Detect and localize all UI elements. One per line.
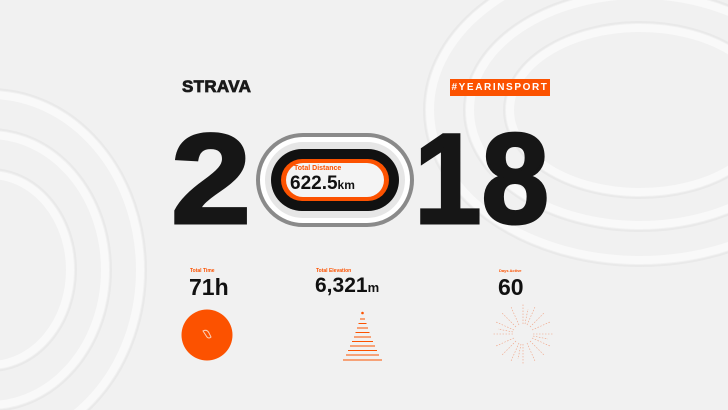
stat: total time: Total Time [190, 268, 215, 274]
logo: STRAVA: STRAVA [182, 77, 251, 96]
stat: total time: 71h [189, 274, 229, 300]
icon: orange circle [182, 310, 232, 360]
badge: #YEARINSPORT: #YEARINSPORT [452, 82, 548, 93]
stat: total time [182, 268, 232, 360]
icon: radial burst [494, 304, 552, 364]
value: 622.5km: 622.5km [290, 173, 355, 194]
stat: days active [494, 268, 552, 364]
digits 18: 18 [414, 108, 549, 251]
track oval: total distance [256, 133, 414, 227]
badge: #YEARINSPORT [450, 79, 550, 96]
stat: days active: Days Active [499, 268, 522, 273]
icon: elevation triangle [343, 312, 382, 360]
stat: total elevation: Total Elevation [316, 268, 351, 274]
stat: total elevation [315, 268, 382, 360]
label: Total Distance: Total Distance [294, 165, 341, 172]
stat: days active: 60 [498, 274, 524, 300]
stat: total elevation: 6,321m [315, 274, 379, 297]
big year digits [171, 108, 549, 251]
digit 2: 2 [171, 108, 251, 251]
